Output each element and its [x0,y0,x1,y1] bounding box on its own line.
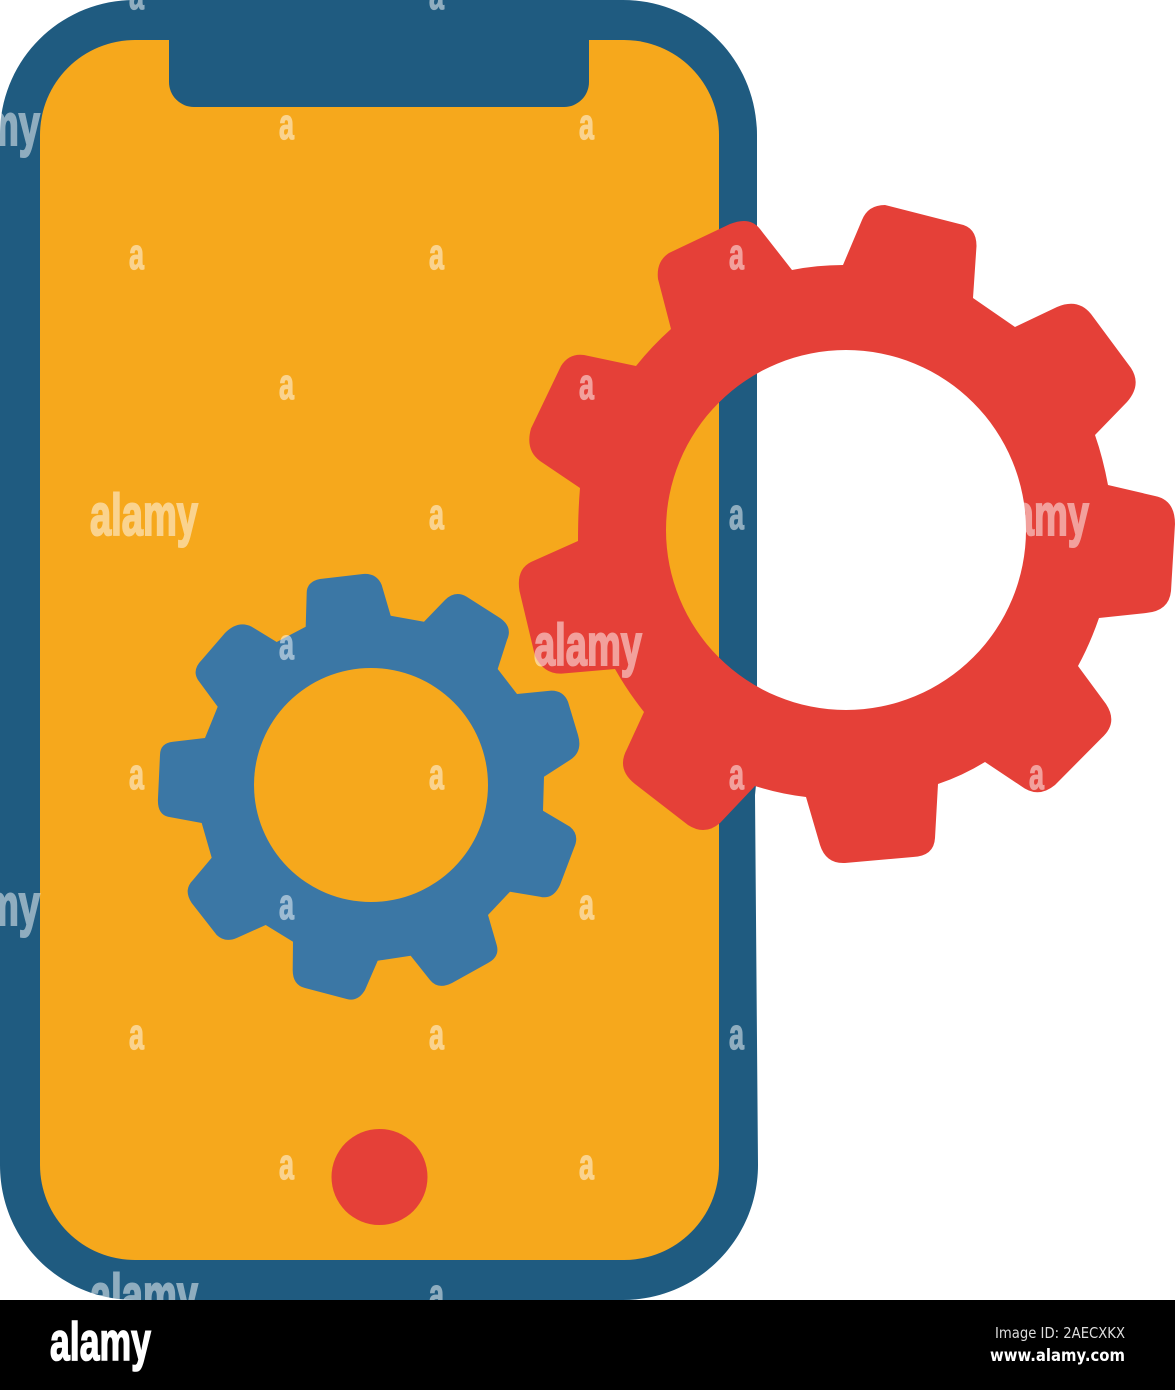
footer bar [0,1300,1175,1390]
watermarks: a [729,230,744,279]
watermarks: a [279,880,294,929]
watermarks: alamy [90,1263,198,1328]
watermarks: a [1029,750,1044,799]
phone icon [0,0,758,1300]
watermarks: alamy [90,483,198,548]
watermarks: a [279,360,294,409]
footer logo: alamy [50,1312,151,1372]
watermarks: a [729,750,744,799]
watermarks: alamy [534,613,642,678]
red gear [519,205,1175,863]
watermarks: a [579,100,594,149]
watermarks: a [429,1270,444,1319]
phone notch [169,40,589,107]
watermarks: a [579,880,594,929]
watermarks: a [279,620,294,669]
watermarks: a [429,490,444,539]
watermarks: a [129,750,144,799]
watermarks: a [729,1010,744,1059]
phone body [0,0,758,1300]
watermarks: a [579,1140,594,1189]
watermarks: a [279,1140,294,1189]
watermarks: a [429,1010,444,1059]
blue gear [158,574,579,1000]
phone screen [40,40,719,1260]
watermarks: a [279,100,294,149]
watermarks: a [729,490,744,539]
home button [332,1129,428,1225]
watermarks: a [129,230,144,279]
watermarks: a [579,360,594,409]
watermarks: a [129,1010,144,1059]
website: www.alamy.com [990,1346,1125,1366]
watermarks: a [429,750,444,799]
image id: Image ID: 2AECXKX [995,1324,1125,1342]
watermarks: a [429,230,444,279]
watermarks: alamy [981,483,1089,548]
